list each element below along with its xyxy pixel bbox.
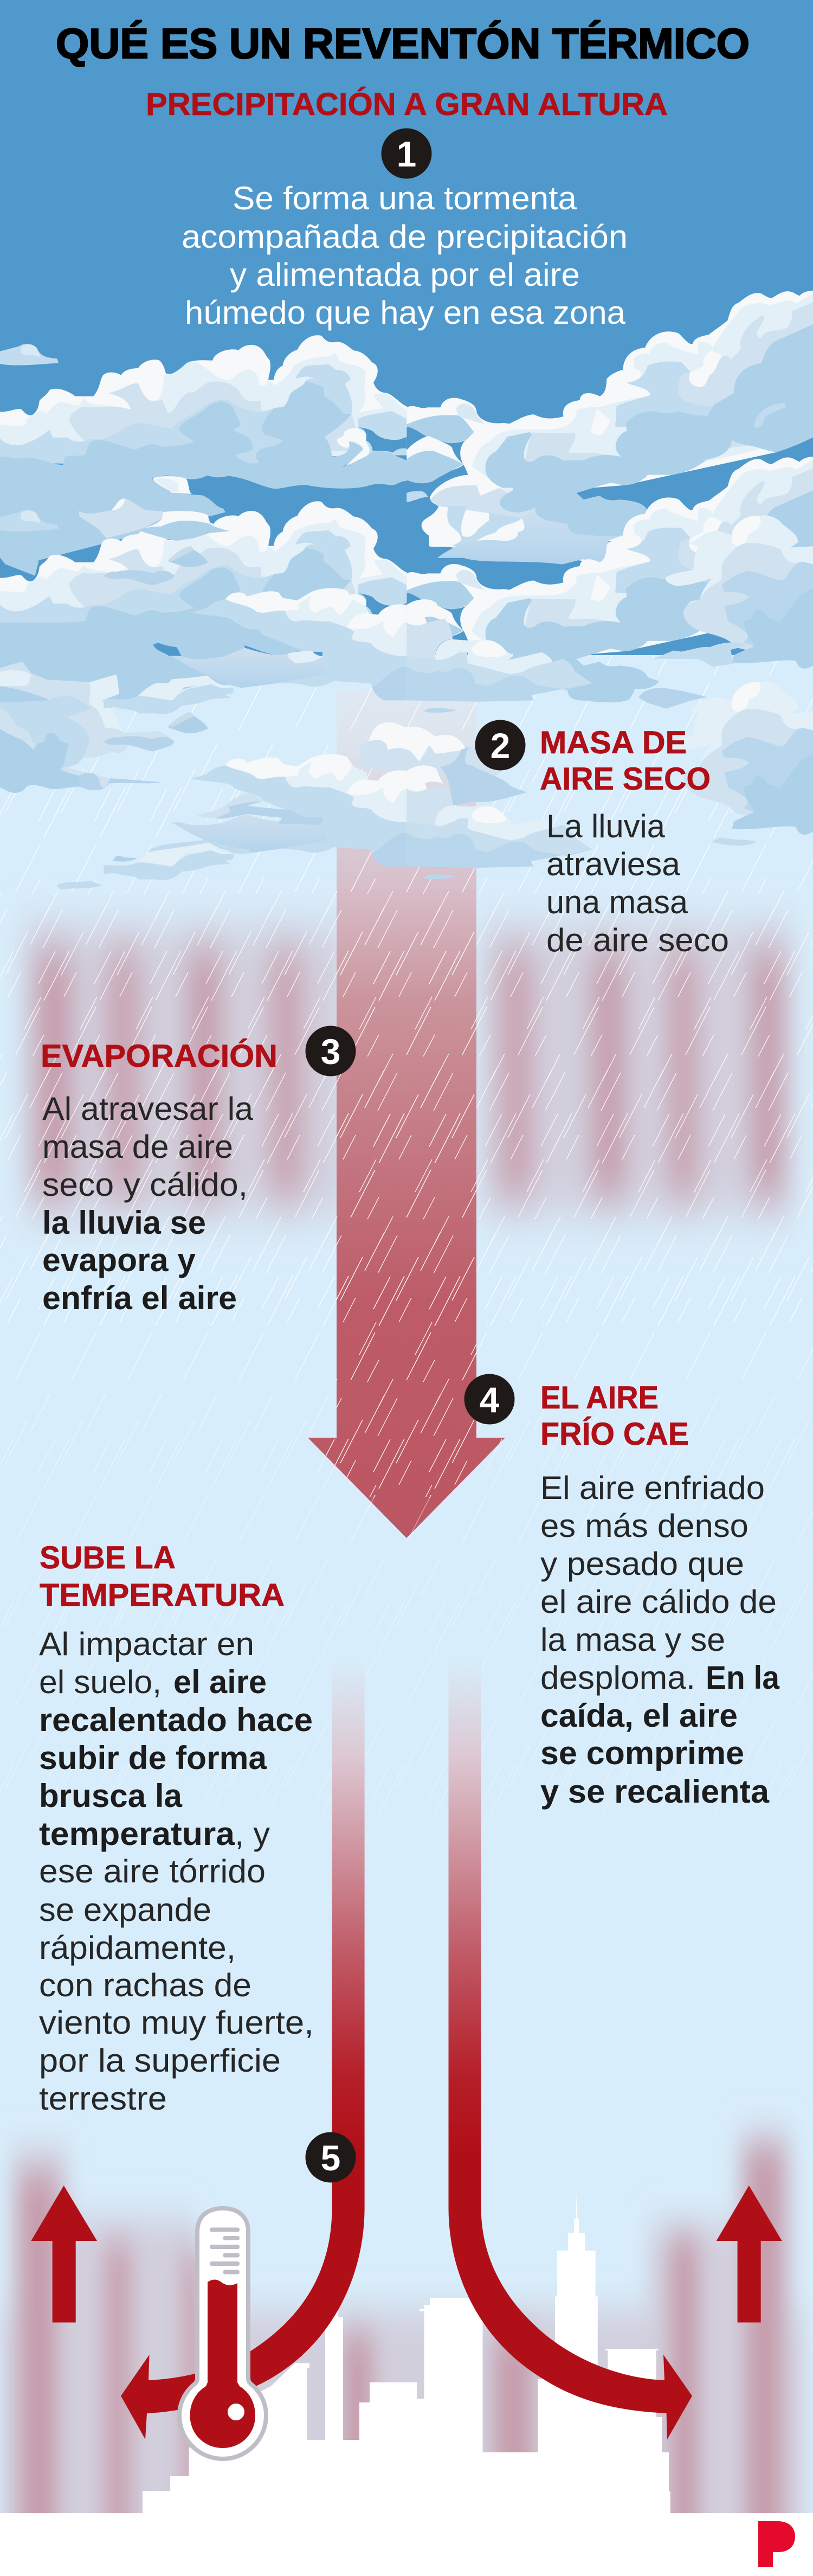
- step 1 text: Se forma una tormenta: [233, 180, 577, 216]
- step 4 heading: FRÍO CAE: [540, 1417, 689, 1452]
- step 5 text: viento muy fuerte,: [39, 2004, 314, 2041]
- sparse rain streaks over the air: [0, 655, 813, 1859]
- falling air column and arrow: [308, 690, 505, 1538]
- city skyline: [143, 2194, 670, 2514]
- step 1 heading: PRECIPITACIÓN A GRAN ALTURA: [146, 87, 668, 122]
- step 4 text: caída, el aire: [540, 1697, 738, 1734]
- band F over lower cloud A: [0, 546, 592, 890]
- step 5 badge: [306, 2132, 356, 2182]
- step 3 heading: EVAPORACIÓN: [41, 1039, 278, 1074]
- denser rain streaks in the dry air zone: [0, 879, 813, 1323]
- step 5 text: terrestre: [39, 2080, 167, 2117]
- step 5 text: temperatura: [39, 1816, 235, 1852]
- right lower cloud E and wisps: [423, 643, 813, 879]
- lower central band repeat: [171, 754, 592, 868]
- step 5 text: subir de forma: [39, 1740, 267, 1776]
- step 3 text: Al atravesar la: [42, 1091, 254, 1127]
- step 5 heading: SUBE LA: [40, 1540, 176, 1575]
- step 5 text: por la superficie: [39, 2042, 281, 2079]
- step 4 text: desploma.: [540, 1659, 695, 1696]
- step 2 text: de aire seco: [546, 922, 729, 958]
- step 5 text: ese aire tórrido: [39, 1853, 266, 1889]
- arrow: left up: [31, 2186, 97, 2322]
- small cloud top left: [0, 344, 59, 366]
- step 1 text: acompañada de precipitación: [182, 219, 628, 255]
- lower repeat of cloud A: [0, 501, 513, 742]
- step 5 text: rápidamente,: [39, 1930, 236, 1966]
- step 5 text: se expande: [39, 1892, 211, 1928]
- step 5 text: , y: [235, 1816, 270, 1852]
- step 4 badge: 4: [480, 1380, 500, 1420]
- step 3 text: seco y cálido,: [42, 1167, 248, 1203]
- step 4 text: es más denso: [540, 1508, 749, 1544]
- step 5 text: recalentado hace: [39, 1702, 313, 1738]
- step 5 heading: TEMPERATURA: [40, 1578, 285, 1613]
- step 2 text: una masa: [546, 884, 688, 920]
- step 2 text: atraviesa: [546, 846, 681, 882]
- rain streaks inside the arrow: [325, 729, 502, 1498]
- step 2 heading: [540, 725, 711, 797]
- lower repeat of cloud B: [460, 457, 813, 702]
- hot air flow left with arrow: [121, 1658, 365, 2439]
- step 3 text: masa de aire: [42, 1129, 233, 1165]
- step 4 text: y pesado que: [540, 1546, 744, 1582]
- step 1 text: [182, 180, 628, 331]
- step 5 text: el suelo,: [39, 1664, 162, 1700]
- ground heat columns: [0, 2118, 810, 2513]
- step 2 badge: [475, 720, 526, 770]
- step 1 text: húmedo que hay en esa zona: [185, 294, 626, 331]
- wispy strips: [56, 677, 323, 890]
- step 5 text: el aire: [173, 1664, 267, 1700]
- step 2 heading: AIRE SECO: [540, 761, 711, 797]
- cloud lobes above the column beside badge 2: [360, 722, 519, 778]
- clouds: [0, 291, 813, 890]
- right lower cloud D: [666, 515, 813, 669]
- step 4 heading: [540, 1380, 689, 1452]
- step 4 badge: [464, 1374, 515, 1424]
- step 1 badge: [382, 128, 431, 179]
- small drifting clouds: [104, 676, 234, 714]
- step 3 badge: [306, 1026, 356, 1076]
- mid cloud C: [422, 291, 813, 565]
- blurred hot dry air columns: [22, 927, 794, 1215]
- step 1 text: y alimentada por el aire: [230, 257, 580, 293]
- step 4 heading: EL AIRE: [540, 1380, 659, 1415]
- step 5 text: Al impactar en: [39, 1626, 254, 1662]
- step 5 text: [39, 1626, 314, 2117]
- left lower cloud H: [0, 662, 174, 793]
- step 5 badge: 5: [321, 2138, 340, 2178]
- step 3 text: la lluvia se: [42, 1204, 206, 1241]
- icon: thermometer: [179, 2208, 266, 2459]
- step 4 text: El aire enfriado: [540, 1470, 765, 1506]
- step 2 badge: 2: [491, 726, 510, 766]
- step 4 text: En la: [706, 1659, 780, 1696]
- central band with white caps: [171, 588, 592, 702]
- step 2 heading: MASA DE: [540, 725, 687, 760]
- step 3 badge: 3: [321, 1031, 340, 1072]
- title: QUÉ ES UN REVENTÓN TÉRMICO: [56, 20, 750, 67]
- step 2 text: [546, 808, 729, 958]
- step 3 text: evapora y: [42, 1242, 196, 1278]
- step 4 text: la masa y se: [540, 1622, 725, 1658]
- lower repeat of top-left small cloud: [0, 510, 59, 531]
- icon: publisher logo: [758, 2521, 795, 2567]
- step 1 badge: 1: [397, 134, 416, 174]
- step 5 text: con rachas de: [39, 1967, 251, 2003]
- step 4 text: [540, 1470, 780, 1810]
- step 4 text: el aire cálido de: [540, 1584, 777, 1620]
- step 4 text: se comprime: [540, 1735, 744, 1771]
- white ground strip: [0, 2513, 813, 2576]
- step 5 heading: [40, 1540, 285, 1613]
- hot air flow right with arrow: [449, 1658, 692, 2439]
- step 3 text: enfría el aire: [42, 1280, 237, 1316]
- step 2 text: La lluvia: [546, 808, 666, 844]
- step 4 text: y se recalienta: [540, 1773, 770, 1810]
- arrow: right up: [717, 2186, 782, 2322]
- step 5 text: brusca la: [39, 1778, 183, 1814]
- step 3 text: [42, 1091, 254, 1316]
- patches in the mid cloud layer: [79, 498, 229, 541]
